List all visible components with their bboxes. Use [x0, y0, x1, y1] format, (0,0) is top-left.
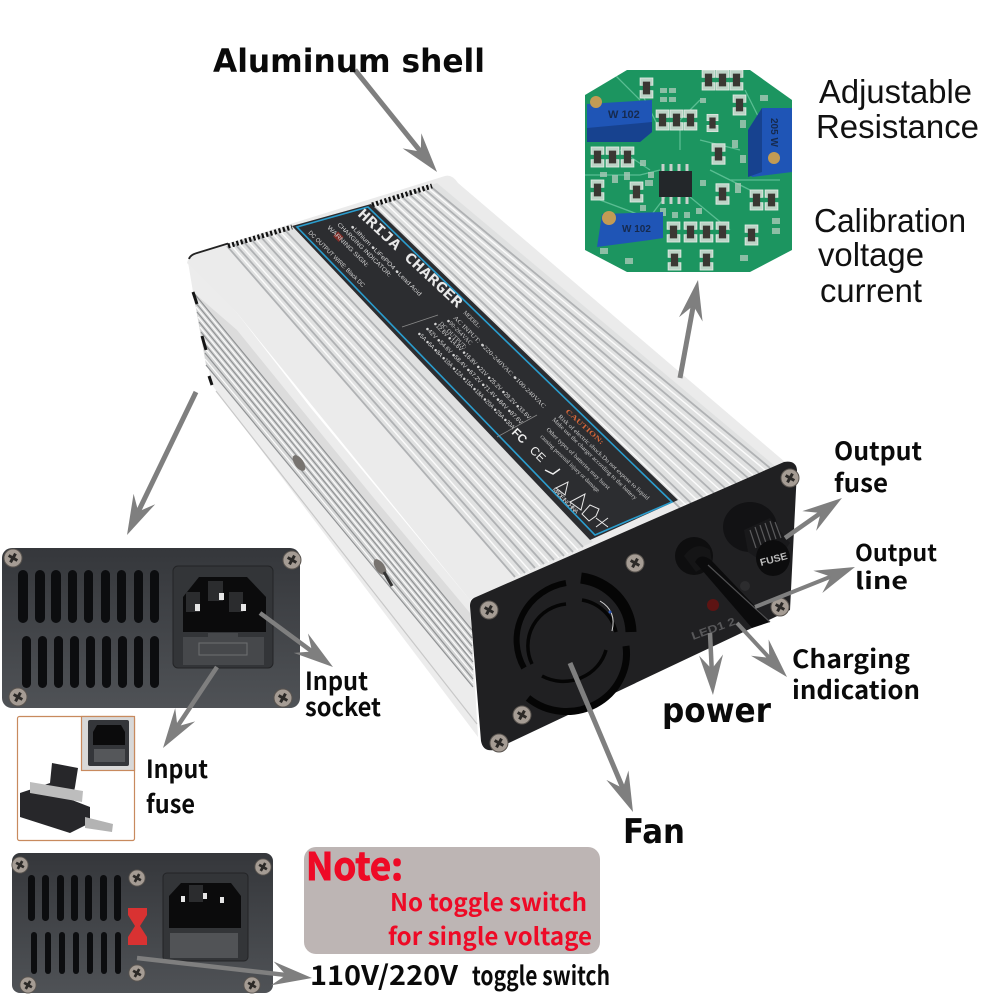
potentiometers	[587, 96, 792, 247]
label: calibration voltage current: voltage	[818, 236, 924, 273]
charger body	[187, 176, 785, 737]
brand name: HRIJA CHARGER	[354, 206, 466, 312]
arrow: output line	[755, 574, 836, 607]
label: calibration voltage current: Calibration	[814, 202, 966, 239]
arrow: back panel	[136, 392, 196, 517]
power socket	[173, 566, 273, 668]
arrow: power	[710, 633, 712, 675]
product label	[292, 204, 678, 540]
label: adjustable resistance: Resistance	[816, 108, 979, 145]
output cable	[675, 537, 770, 628]
LEDs	[690, 581, 750, 643]
fuse holder	[20, 763, 113, 833]
product label: Make use the charger according to the battery	[551, 417, 638, 501]
side face	[188, 262, 478, 737]
fuse holder	[723, 502, 790, 576]
product label: Other types of batteries may burst	[545, 426, 612, 491]
arrow: output fuse	[785, 510, 826, 538]
label: fan: Fan	[623, 812, 685, 852]
IC chip	[659, 164, 692, 204]
label: charging indication: indication	[792, 671, 920, 707]
product label: Risk of electric shock.Do not expose to liquid	[557, 413, 651, 502]
product label: ●42V ●54.6V ●58.4V ●67.2V ●71.4V ●84V ●87.6V	[424, 326, 523, 426]
label: calibration voltage current: current	[820, 272, 922, 309]
arrow: input socket	[260, 613, 317, 655]
inset: back panel with input socket	[2, 548, 301, 708]
potentiometers: W 102	[622, 224, 651, 235]
potentiometers: W 102	[608, 109, 640, 121]
label: adjustable resistance: Adjustable	[819, 73, 972, 110]
front panel	[470, 462, 799, 752]
label: output line	[855, 534, 937, 596]
label: toggle switch: toggle switch	[472, 956, 610, 993]
fuse holder: FUSE	[759, 551, 789, 569]
arrow: toggle switch	[137, 958, 292, 976]
arrow: circuit board	[680, 300, 694, 378]
output wire line: DC OUTPUT WIRE: Black DC	[307, 230, 366, 289]
vent slots	[18, 570, 159, 688]
solder pads	[600, 88, 780, 270]
certification marks: CE	[527, 443, 549, 465]
screws	[12, 857, 271, 993]
title: aluminum shell: Aluminum shell	[213, 42, 485, 80]
label: input socket: socket	[305, 688, 381, 724]
product label: WARNING SIGN:	[326, 225, 370, 269]
screws	[4, 549, 301, 707]
product label: AC INPUT: ●220-240VAC ●100-240VAC	[452, 315, 546, 410]
label: output fuse: fuse	[834, 464, 888, 500]
label: input fuse: fuse	[146, 785, 195, 821]
specification lines: MODEL:	[462, 310, 482, 330]
potentiometers: 205 W	[768, 118, 779, 147]
label: input socket	[305, 662, 381, 724]
callout: note	[304, 836, 600, 954]
label: input fuse	[146, 750, 208, 821]
arrow: input fuse	[174, 667, 217, 731]
label: toggle switch: 110V/220V	[310, 954, 458, 993]
label: output line: Output	[855, 534, 937, 568]
product label: DC OUTPUT:	[438, 321, 468, 351]
product label: ●12.6V ●14.6V ●16.8V ●21V ●25.2V ●29.2V ●33.6V	[432, 321, 531, 421]
note text	[388, 883, 592, 952]
label: charging indication	[792, 640, 920, 707]
label: adjustable resistance	[816, 73, 979, 145]
certification marks: MADE IN CHINA	[551, 487, 579, 515]
toggle switch	[128, 908, 147, 945]
product label: ●90-264VAC	[445, 318, 473, 346]
certification marks	[509, 425, 608, 527]
label: charging indication: Charging	[792, 640, 910, 676]
caution text: CAUTION:	[564, 408, 605, 446]
arrow: aluminum shell	[355, 70, 424, 156]
battery type line: ●Lithium ●LiFePO4 ●Lead Acid	[349, 224, 422, 298]
fan grill	[517, 578, 631, 712]
inset: back panel with toggle switch	[12, 853, 273, 993]
label: output line: line	[855, 562, 908, 596]
side screws	[290, 453, 392, 586]
product label: ●5A ●6A ●8A ●10A ●12A ●15A ●18A ●20A ●25A ●30A	[416, 331, 515, 431]
certification marks: FC	[509, 425, 530, 447]
socket thumbnail	[82, 716, 134, 770]
arrow: fan	[570, 663, 625, 794]
top face	[187, 176, 785, 600]
label: toggle switch	[310, 954, 610, 993]
LEDs: LED1 2	[690, 616, 737, 643]
indicator line: CHARGING INDICATOR:	[336, 222, 392, 279]
front screws	[480, 469, 799, 752]
note text: No toggle switch	[390, 883, 587, 918]
inset: circuit board	[585, 70, 792, 272]
vent slots	[28, 875, 121, 974]
resistors	[591, 70, 778, 270]
product label: causing personal injury or damage	[539, 434, 601, 494]
inset: input fuse detail	[18, 716, 134, 840]
label: output fuse	[834, 432, 922, 500]
label: input socket: Input	[305, 662, 368, 698]
power socket	[163, 873, 248, 961]
fan hub highlight	[600, 601, 613, 631]
note heading: Note:	[306, 836, 403, 891]
label: input fuse: Input	[146, 750, 208, 786]
arrow: charging indication	[737, 623, 773, 662]
label: output fuse: Output	[834, 432, 922, 468]
label: power: power	[662, 691, 771, 731]
note text: for single voltage	[388, 917, 592, 952]
label: calibration voltage current	[814, 202, 966, 309]
